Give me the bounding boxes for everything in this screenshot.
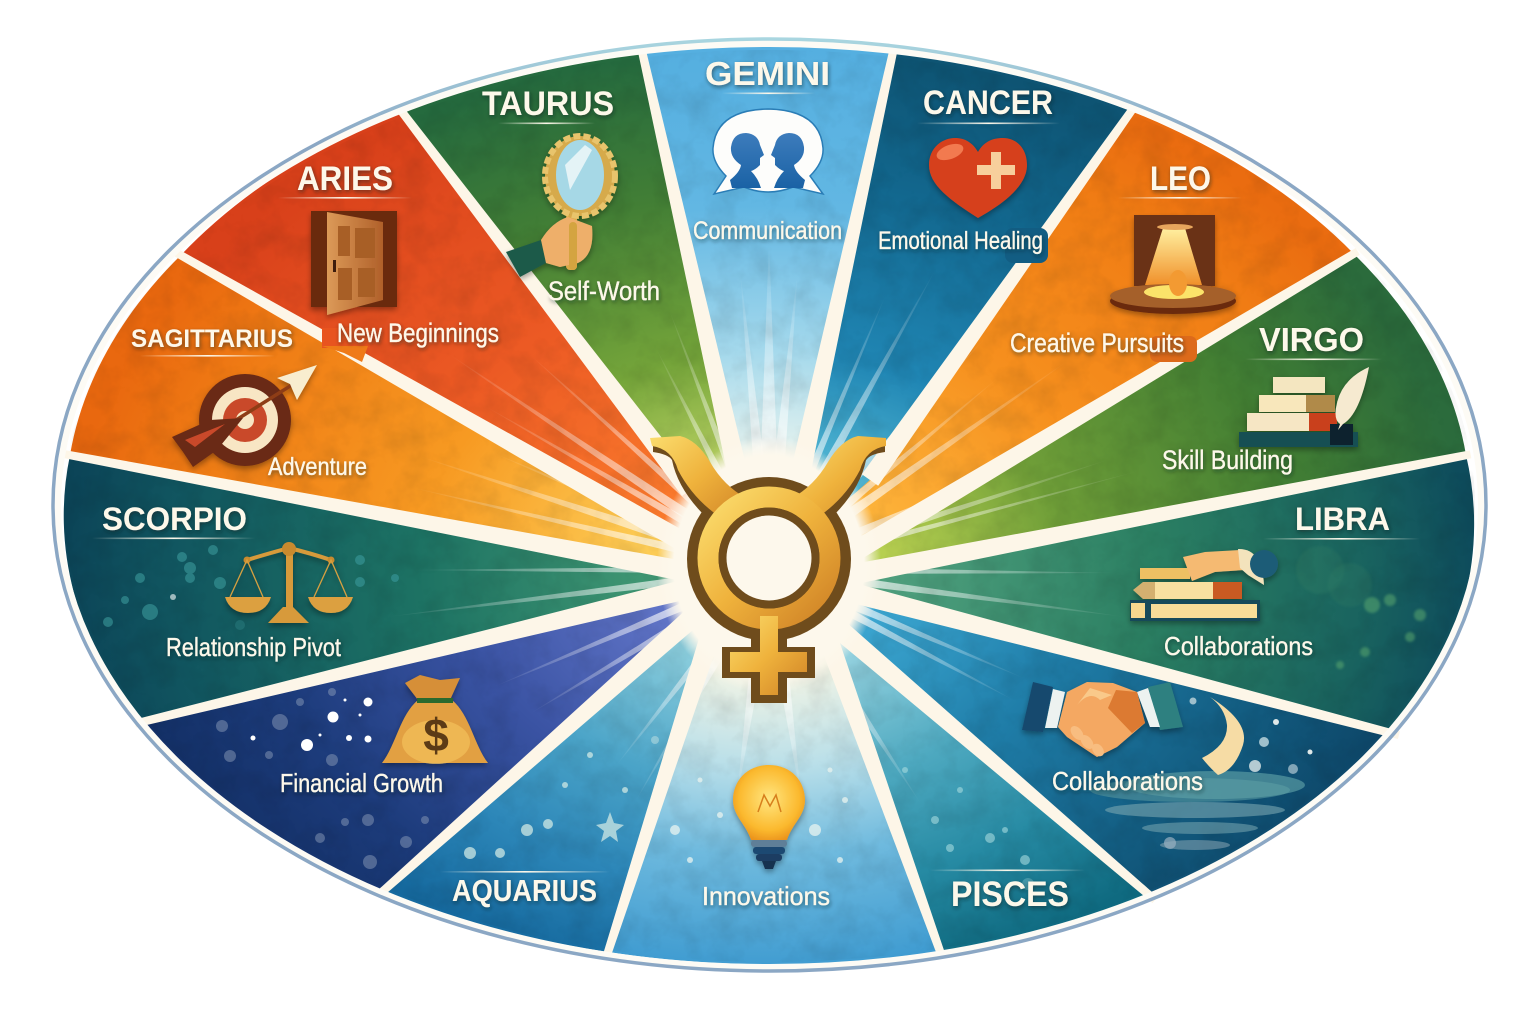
sign: gemini bbox=[693, 55, 842, 245]
panel: financial growth bbox=[140, 570, 769, 891]
icon: hand mirror bbox=[506, 136, 615, 277]
heading: libra: LIBRA bbox=[1295, 501, 1390, 537]
label: communication: Communication bbox=[693, 217, 842, 245]
panel: collaborations bbox=[769, 570, 1395, 897]
sign: taurus bbox=[482, 85, 660, 306]
panel: aries bbox=[181, 110, 769, 570]
central glow bbox=[647, 425, 891, 705]
icon: moon and water bbox=[1090, 697, 1312, 850]
heading: leo: LEO bbox=[1150, 160, 1211, 198]
texture: pisces sparkles bbox=[902, 767, 1034, 890]
heading: gemini: GEMINI bbox=[705, 55, 830, 92]
notch: leo label tab bbox=[1150, 336, 1197, 362]
sign: innovations bbox=[670, 765, 848, 911]
label: emotional healing: Emotional Healing bbox=[878, 227, 1043, 255]
heading: pisces: PISCES bbox=[951, 875, 1069, 914]
panel: taurus bbox=[401, 51, 769, 570]
sign: sagittarius bbox=[131, 325, 367, 481]
panel: leo bbox=[769, 111, 1354, 570]
icon: heart with plus bbox=[929, 138, 1027, 218]
texture: innovations sparkles bbox=[670, 768, 848, 863]
panel: aquarius bbox=[383, 570, 769, 952]
panel: sagittarius bbox=[70, 255, 769, 570]
heading: taurus: TAURUS bbox=[482, 85, 614, 123]
texture: libra blobs bbox=[1296, 546, 1426, 669]
label: collaborations: Collaborations bbox=[1164, 631, 1313, 661]
label: financial growth: Financial Growth bbox=[280, 768, 443, 798]
label: innovations: Innovations bbox=[702, 881, 830, 911]
texture: starfield bbox=[216, 688, 429, 869]
label: adventure: Adventure bbox=[268, 453, 367, 481]
label: self-worth: Self-Worth bbox=[548, 276, 660, 306]
sign: pisces bbox=[902, 767, 1085, 914]
mercury symbol bbox=[650, 436, 886, 703]
panel: pisces bbox=[769, 570, 1151, 951]
heading: scorpio: SCORPIO bbox=[102, 501, 247, 537]
icon: door bbox=[311, 211, 397, 315]
label: skill building: Skill Building bbox=[1162, 445, 1293, 475]
icon: money bag: $ bbox=[423, 709, 449, 761]
texture: scorpio blobs bbox=[103, 545, 399, 630]
sign: handshake panel bbox=[1022, 682, 1312, 850]
icon: balance scales bbox=[225, 542, 353, 623]
icon: handshake bbox=[1022, 682, 1183, 759]
panel: scorpio bbox=[64, 455, 769, 722]
sign: cancer bbox=[878, 84, 1060, 263]
sign: virgo bbox=[1162, 321, 1382, 475]
label: relationship pivot: Relationship Pivot bbox=[166, 632, 342, 662]
icon: books and quill bbox=[1239, 367, 1369, 447]
heading: virgo: VIRGO bbox=[1259, 321, 1364, 358]
heading: aquarius: AQUARIUS bbox=[452, 873, 597, 908]
sign: financial growth bbox=[216, 675, 488, 869]
sign: leo bbox=[1010, 160, 1242, 362]
sign: aquarius bbox=[440, 736, 659, 908]
heading: sagittarius: SAGITTARIUS bbox=[131, 325, 293, 353]
panel: innovations bbox=[608, 570, 940, 964]
label: new beginnings: New Beginnings bbox=[337, 318, 499, 348]
icon: light bulb bbox=[733, 765, 805, 869]
icon: money bag bbox=[382, 675, 488, 764]
icon: spotlight on stage bbox=[1110, 215, 1236, 314]
heading: aries: ARIES bbox=[297, 160, 393, 198]
sign: libra bbox=[1130, 501, 1426, 669]
icon: books and hand bbox=[1130, 549, 1278, 621]
sign: aries bbox=[278, 160, 499, 362]
panel: virgo bbox=[769, 254, 1466, 573]
panel: gemini bbox=[642, 44, 893, 570]
panel: cancer bbox=[769, 52, 1131, 570]
icon: speech bubble with faces bbox=[713, 109, 823, 194]
notch: cancer label tab bbox=[1005, 228, 1048, 263]
texture: aquarius sparkles bbox=[464, 736, 659, 859]
label: collaborations: Collaborations bbox=[1052, 766, 1203, 796]
sign: scorpio bbox=[92, 501, 399, 662]
icon: target and arrow bbox=[172, 365, 317, 467]
notch: aries label tab bbox=[322, 328, 370, 362]
panel: libra bbox=[769, 455, 1474, 734]
label: creative pursuits: Creative Pursuits bbox=[1010, 328, 1184, 358]
heading: cancer: CANCER bbox=[923, 84, 1053, 122]
